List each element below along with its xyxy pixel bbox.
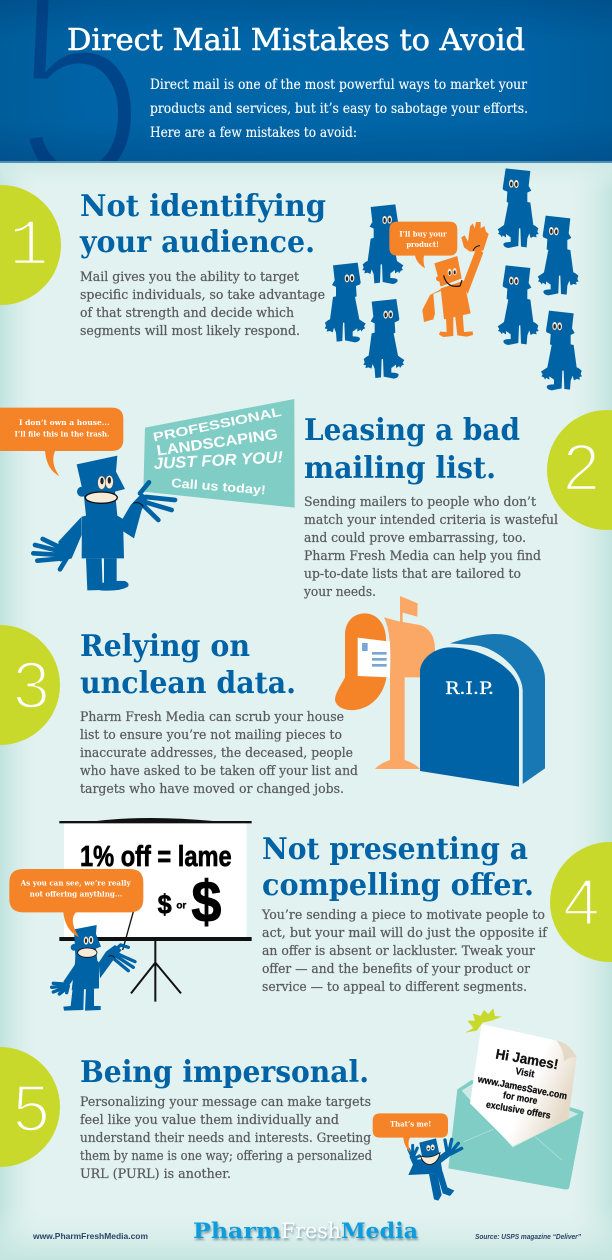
letter: Hi James! [494, 1046, 560, 1072]
intro text: Here are a few mistakes to avoid: [150, 125, 357, 141]
heading 2: mailing list. [304, 451, 496, 486]
burst [465, 1008, 502, 1033]
speech bubble: not offering anything... [30, 890, 122, 899]
website url: www.PharmFreshMedia.com [32, 1231, 148, 1241]
tombstone: R.I.P. [445, 679, 494, 698]
logo: Media [341, 1218, 418, 1243]
body text 1: Mail gives you the ability to target [80, 269, 299, 284]
mailer sign: JUST FOR YOU! [153, 449, 284, 473]
speech bubble: product! [406, 240, 439, 249]
body text 2: Pharm Fresh Media can help you find [304, 548, 541, 563]
number badge 1 [0, 185, 61, 305]
letter: exclusive offers [485, 1099, 551, 1122]
logo: Fresh [281, 1219, 341, 1243]
number badge 3 [0, 625, 60, 745]
heading 2: Leasing a bad [304, 413, 520, 448]
body text 5: understand their needs and interests. Greeting [80, 1130, 371, 1145]
body text 5: feel like you value them individually and [80, 1112, 339, 1127]
letter: Visit [514, 1066, 536, 1080]
body text 4: service — to appeal to different segments. [262, 979, 527, 994]
heading 5: Being impersonal. [80, 1055, 369, 1090]
body text 3: list to ensure you’re not mailing pieces to [80, 727, 342, 742]
letter: for more [502, 1090, 539, 1107]
heading 3 [80, 629, 296, 701]
figure with pointer [52, 912, 135, 1011]
screen: $ [191, 869, 221, 934]
logo [193, 1218, 418, 1243]
speech bubble [9, 869, 143, 937]
number badge 2: 2 [563, 430, 600, 504]
heading 4: Not presenting a [262, 832, 528, 867]
number badge 2 [547, 410, 612, 530]
illustration: personalized letter and envelope [373, 1008, 584, 1201]
mailer sign: LANDSCAPING [156, 427, 279, 460]
header band [0, 0, 612, 246]
panel: mistake 1 [0, 168, 582, 390]
body text 2 [303, 494, 558, 599]
body text 3: Pharm Fresh Media can scrub your house [80, 709, 344, 724]
body text 2: your needs. [303, 584, 376, 599]
mailer sign: PROFESSIONAL [152, 405, 283, 445]
number badge 1: 1 [9, 209, 49, 284]
body text 2: up-to-date lists that are tailored to [304, 566, 521, 581]
heading 4: compelling offer. [262, 868, 534, 903]
body text 1: segments will most likely respond. [80, 323, 300, 338]
speech bubble [0, 408, 123, 476]
tombstone [420, 634, 545, 787]
logo: Pharm [193, 1218, 281, 1243]
heading 3: Relying on [80, 629, 250, 664]
screen: 1% off = lame [80, 841, 232, 873]
body text 3: inaccurate addresses, the deceased, people [80, 745, 353, 760]
body text 2: Sending mailers to people who don’t [304, 494, 536, 509]
figure [33, 456, 175, 591]
body text 4: an offer is absent or lackluster. Tweak your [262, 943, 536, 958]
heading 1 [79, 189, 326, 260]
body text 1 [80, 269, 325, 338]
speech bubble [389, 222, 457, 268]
illustration: man holding mailer [0, 399, 295, 591]
body text 1: specific individuals, so take advantage [80, 287, 325, 302]
body text 2: match your intended criteria is wasteful [304, 512, 558, 527]
body text 3: who have asked to be taken off your list and [80, 763, 358, 778]
intro text: products and services, but it’s easy to sabotage your efforts. [150, 101, 528, 117]
body text 4: offer — and the benefits of your product or [262, 961, 531, 976]
heading 1: Not identifying [80, 189, 326, 224]
screen: or [176, 901, 186, 912]
panel: mistake 4 [9, 818, 612, 1011]
letter: www.JamesSave.com [476, 1074, 568, 1102]
title: Direct Mail Mistakes to Avoid [67, 23, 525, 58]
body text 1: of that strength and decide which [80, 305, 294, 320]
body text 3: targets who have moved or changed jobs. [80, 781, 344, 796]
mailbox [335, 596, 435, 769]
body text 3 [80, 709, 358, 796]
panel: mistake 5 [0, 1008, 584, 1201]
panel: mistake 2 [0, 399, 612, 599]
mailer sign: Call us today! [171, 476, 266, 497]
speech bubble [373, 1113, 448, 1153]
body text 4: act, but your mail will do just the opposite if [262, 925, 548, 940]
heading 2 [304, 413, 520, 486]
heading 4 [262, 832, 534, 903]
orange figure [422, 222, 489, 337]
intro text [150, 77, 528, 141]
heading 1: your audience. [79, 225, 315, 260]
footer [32, 1218, 581, 1243]
speech bubble: I don’t own a house... [19, 418, 110, 427]
body text 5: them by name is one way; offering a personalized [80, 1148, 372, 1163]
screen [59, 818, 252, 1002]
number badge 3: 3 [13, 648, 50, 722]
illustration: mailbox and tombstone [335, 596, 545, 787]
body text 5 [80, 1094, 372, 1181]
body text 4 [261, 907, 548, 994]
screen: $ [158, 889, 172, 919]
body text 5: URL (PURL) is another. [80, 1166, 231, 1181]
number badge 4 [550, 842, 612, 962]
illustration: presenter and projection screen [9, 818, 252, 1011]
speech bubble: As you can see, we’re really [20, 879, 132, 888]
heading 3: unclean data. [80, 666, 296, 701]
excited figure [408, 1138, 462, 1201]
number badge 5 [0, 1047, 60, 1167]
intro text: Direct mail is one of the most powerful ways to market your [150, 77, 527, 93]
body text 5: Personalizing your message can make targets [80, 1094, 371, 1109]
illustration: crowd with one orange buyer [325, 168, 582, 390]
speech bubble: I’ll buy your [399, 230, 447, 239]
speech bubble: I’ll file this in the trash. [14, 429, 109, 438]
speech bubble: That’s me! [390, 1120, 431, 1129]
envelope [448, 1080, 584, 1189]
source line: Source: USPS magazine “Deliver” [475, 1232, 581, 1241]
number badge 5: 5 [13, 1071, 50, 1145]
panel: mistake 3 [0, 596, 545, 796]
body text 4: You’re sending a piece to motivate people to [261, 907, 545, 922]
number badge 4: 4 [563, 865, 600, 939]
mailer sign [143, 399, 295, 508]
letter [470, 1024, 577, 1146]
body text 2: and could prove embarrassing, too. [304, 530, 526, 545]
